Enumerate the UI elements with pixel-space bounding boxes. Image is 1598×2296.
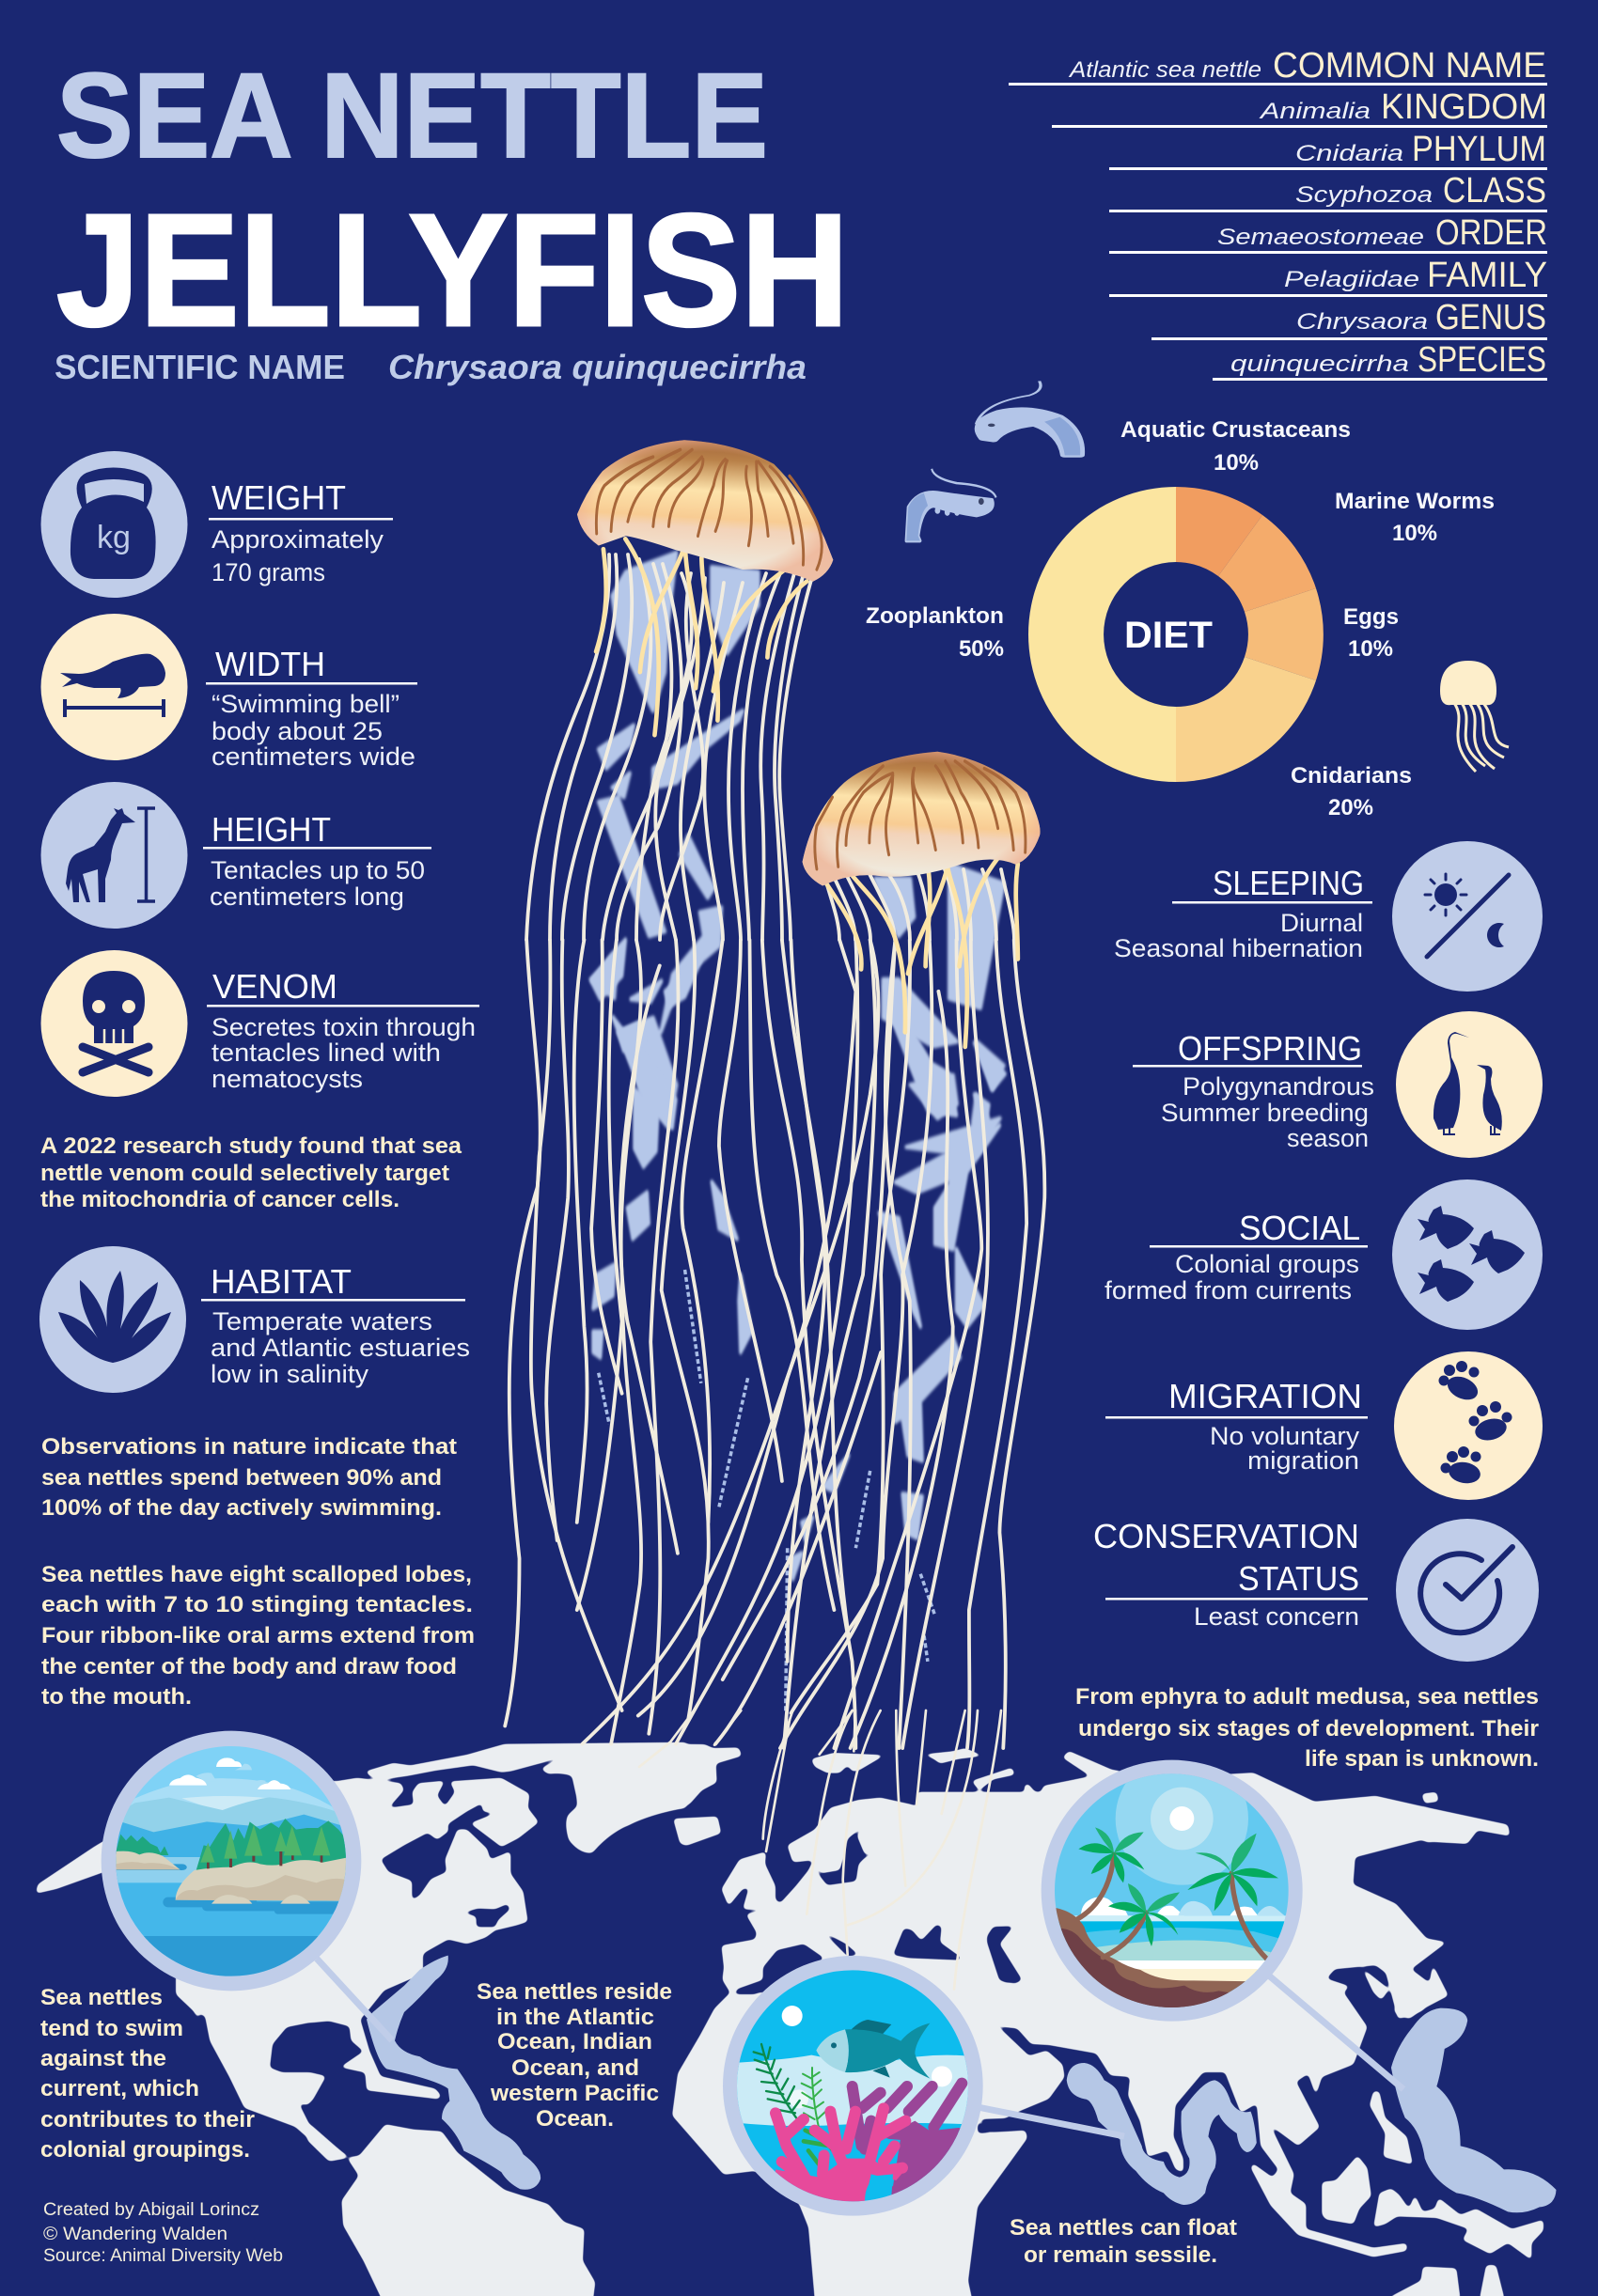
panel: weight xyxy=(41,451,393,598)
icon: small jellyfish xyxy=(1440,661,1509,772)
social text: SOCIAL xyxy=(1239,1209,1360,1247)
habitat text: and Atlantic estuaries xyxy=(211,1334,470,1362)
text: range oceans xyxy=(477,1979,672,2132)
feathery arm tips: large jellyfish xyxy=(599,1270,788,1713)
tentacles: upper section, smaller jellyfish xyxy=(825,869,1014,940)
diet labels: Marine Worms xyxy=(1335,489,1495,514)
taxonomy list: FAMILY xyxy=(1427,256,1547,295)
text: credits: Created by Abigail Lorincz xyxy=(43,2200,259,2220)
taxonomy list xyxy=(1009,46,1547,381)
icon: whale with ruler xyxy=(41,614,188,760)
icon: sun and moon xyxy=(1392,841,1543,992)
text: range oceans: Ocean. xyxy=(536,2106,614,2132)
text: range oceans: Ocean, and xyxy=(511,2055,639,2081)
text: swimming observations: Observations in nature indicate that xyxy=(41,1434,457,1460)
diet labels xyxy=(866,417,1495,820)
bell: large jellyfish xyxy=(577,440,833,582)
diet labels: 50% xyxy=(959,636,1004,662)
diet labels: Cnidarians xyxy=(1291,763,1412,789)
habitat text: Temperate waters xyxy=(212,1307,432,1335)
width text: “Swimming bell” xyxy=(212,690,400,718)
venom text: VENOM xyxy=(212,967,337,1006)
icon: shrimp upper xyxy=(976,381,1080,455)
habitat text: low in salinity xyxy=(211,1360,369,1388)
offspring text: Summer breeding xyxy=(1161,1099,1369,1127)
text: range oceans: western Pacific xyxy=(490,2081,659,2106)
height text: Tentacles up to 50 xyxy=(211,856,425,884)
social text: Colonial groups xyxy=(1175,1250,1359,1278)
conservation text xyxy=(1093,1517,1368,1631)
text: development stages: undergo six stages of development. Their xyxy=(1078,1716,1539,1742)
text: swimming against current: tend to swim xyxy=(40,2016,183,2041)
text: swimming observations xyxy=(41,1434,457,1521)
sleeping text: SLEEPING xyxy=(1213,864,1364,902)
height text xyxy=(203,810,431,911)
text: venom research note: nettle venom could selectively target xyxy=(40,1161,449,1186)
world map xyxy=(36,1742,1557,2296)
diet donut chart: DIET xyxy=(1124,615,1213,656)
feathery arm tips: smaller jellyfish xyxy=(855,1471,935,1662)
icon: kettlebell: kg xyxy=(97,520,131,555)
diet labels: Eggs xyxy=(1343,604,1399,630)
title: SCIENTIFIC NAME xyxy=(55,348,345,386)
conservation text: CONSERVATION xyxy=(1093,1517,1359,1555)
panel: habitat xyxy=(39,1246,470,1393)
weight text xyxy=(209,478,393,586)
tentacles: lower section xyxy=(505,940,1044,1748)
width text xyxy=(206,645,417,771)
venom text: Secretes toxin through xyxy=(212,1013,476,1041)
jellyfish: smaller right xyxy=(803,752,1041,1047)
sleeping text: Seasonal hibernation xyxy=(1114,934,1363,962)
icon: kettlebell xyxy=(41,451,188,598)
scene: tropical beach lens xyxy=(1042,1752,1303,2022)
migration text: MIGRATION xyxy=(1168,1377,1362,1415)
text: body description: each with 7 to 10 stinging tentacles. xyxy=(41,1592,473,1617)
text: body description: to the mouth. xyxy=(41,1684,192,1710)
width text: centimeters wide xyxy=(212,742,415,771)
panel: offspring xyxy=(1133,1011,1543,1158)
text: swimming against current: Sea nettles xyxy=(40,1985,163,2010)
panel: height xyxy=(41,782,431,929)
taxonomy list: Scyphozoa xyxy=(1295,182,1433,208)
taxonomy list: Pelagiidae xyxy=(1284,267,1419,292)
tentacles: fading over map xyxy=(639,1710,1001,1990)
sleeping text: Diurnal xyxy=(1280,909,1363,937)
scene: coastal forest lens xyxy=(102,1731,361,1991)
text: float or sessile: or remain sessile. xyxy=(1024,2242,1217,2268)
taxonomy list: Animalia xyxy=(1258,99,1371,124)
migration text: No voluntary xyxy=(1210,1422,1360,1450)
title: JELLYFISH xyxy=(56,181,849,360)
ocean current highlights xyxy=(367,1956,1557,2212)
text: body description xyxy=(41,1562,475,1710)
text: float or sessile xyxy=(1010,2215,1237,2268)
migration text: migration xyxy=(1247,1446,1359,1475)
text: body description: the center of the body and draw food xyxy=(41,1654,457,1679)
jellyfish: large left xyxy=(505,440,1044,1990)
taxonomy list: KINGDOM xyxy=(1381,87,1547,127)
text: range oceans: Sea nettles reside xyxy=(477,1979,672,2005)
panel: sleeping xyxy=(1114,841,1543,992)
text: development stages xyxy=(1075,1684,1539,1772)
yellow frills: smaller jellyfish xyxy=(826,855,1018,1047)
title: Chrysaora quinquecirrha xyxy=(388,348,807,386)
title xyxy=(55,49,849,386)
taxonomy list: Semaeostomeae xyxy=(1217,225,1424,250)
weight text: 170 grams xyxy=(212,558,325,586)
scene: coral reef lens xyxy=(723,1956,983,2216)
taxonomy list: GENUS xyxy=(1435,298,1546,337)
text: body description: Sea nettles have eight scalloped lobes, xyxy=(41,1562,472,1587)
bell: smaller jellyfish xyxy=(803,752,1041,886)
venom text: nematocysts xyxy=(212,1065,363,1093)
icon: shrimp lower xyxy=(906,469,996,540)
habitat text: HABITAT xyxy=(211,1262,352,1301)
text: body description: Four ribbon-like oral arms extend from xyxy=(41,1623,475,1648)
panel: venom xyxy=(41,950,479,1097)
panel: width xyxy=(41,614,417,771)
height text: centimeters long xyxy=(210,882,404,911)
conservation text: Least concern xyxy=(1194,1602,1359,1631)
text: swimming against current: colonial groupings. xyxy=(40,2137,250,2163)
panel: social xyxy=(1104,1179,1543,1330)
diet labels: 10% xyxy=(1348,636,1393,662)
text: range oceans: in the Atlantic xyxy=(496,2005,654,2030)
oral arms: large jellyfish xyxy=(590,553,759,1357)
taxonomy list: PHYLUM xyxy=(1412,130,1546,169)
yellow frills: large jellyfish xyxy=(596,539,807,735)
icon: paw prints xyxy=(1394,1351,1543,1500)
diet labels: 10% xyxy=(1214,450,1259,476)
offspring text: OFFSPRING xyxy=(1178,1029,1362,1068)
diet labels: Zooplankton xyxy=(866,603,1004,629)
weight text: Approximately xyxy=(212,525,384,554)
icon: school of fish xyxy=(1392,1179,1543,1330)
panel: conservation status xyxy=(1093,1517,1539,1662)
icon: aquatic plant xyxy=(39,1246,186,1393)
weight text: WEIGHT xyxy=(212,478,346,517)
icon: herons xyxy=(1396,1011,1543,1158)
text: swimming against current xyxy=(40,1985,255,2163)
text: swimming observations: sea nettles spend between 90% and xyxy=(41,1465,442,1491)
text: venom research note xyxy=(40,1133,462,1212)
conservation text: STATUS xyxy=(1238,1559,1359,1598)
text: credits: Source: Animal Diversity Web xyxy=(43,2246,283,2266)
taxonomy list: SPECIES xyxy=(1418,340,1546,380)
social text xyxy=(1104,1209,1368,1304)
width text: body about 25 xyxy=(212,717,383,745)
text: range oceans: Ocean, Indian xyxy=(497,2029,652,2054)
oral arms: smaller jellyfish (behind tentacles) xyxy=(791,865,1005,1579)
offspring text: season xyxy=(1287,1124,1369,1152)
icon: check mark xyxy=(1396,1519,1539,1662)
sleeping text xyxy=(1114,864,1372,962)
diet labels: 20% xyxy=(1328,795,1373,820)
habitat text xyxy=(201,1262,470,1388)
text: float or sessile: Sea nettles can float xyxy=(1010,2215,1237,2241)
diet labels: 10% xyxy=(1392,521,1437,546)
social text: formed from currents xyxy=(1104,1276,1352,1304)
height text: HEIGHT xyxy=(212,810,331,849)
icon: skull and crossbones xyxy=(41,950,188,1097)
venom text: tentacles lined with xyxy=(212,1039,441,1067)
text: credits xyxy=(43,2200,283,2266)
pointer lines to map xyxy=(317,1959,1403,2136)
taxonomy list: ORDER xyxy=(1435,213,1547,253)
text: venom research note: A 2022 research study found that sea xyxy=(40,1133,462,1159)
venom text xyxy=(207,967,479,1093)
diet labels: Aquatic Crustaceans xyxy=(1120,417,1351,443)
offspring text: Polygynandrous xyxy=(1183,1072,1374,1101)
taxonomy list: COMMON NAME xyxy=(1273,46,1546,86)
text: credits: © Wandering Walden xyxy=(43,2225,227,2244)
taxonomy list: Chrysaora xyxy=(1296,309,1428,335)
title: SEA NETTLE xyxy=(56,49,768,183)
panel: migration xyxy=(1105,1351,1543,1500)
text: swimming against current: against the xyxy=(40,2046,166,2071)
text: swimming against current: contributes to their xyxy=(40,2107,255,2132)
text: swimming against current: current, which xyxy=(40,2076,199,2101)
text: venom research note: the mitochondria of cancer cells. xyxy=(40,1187,400,1212)
text: development stages: From ephyra to adult medusa, sea nettles xyxy=(1075,1684,1539,1710)
text: development stages: life span is unknown. xyxy=(1305,1746,1539,1772)
offspring text xyxy=(1133,1029,1374,1152)
taxonomy list: Cnidaria xyxy=(1295,141,1403,166)
icon: giraffe with bar xyxy=(41,782,188,929)
taxonomy list: CLASS xyxy=(1443,171,1546,211)
taxonomy list: quinquecirrha xyxy=(1230,351,1409,377)
diet donut chart xyxy=(1028,487,1324,782)
taxonomy list: Atlantic sea nettle xyxy=(1068,57,1261,83)
migration text xyxy=(1105,1377,1368,1475)
tentacles: upper section, large jellyfish xyxy=(526,554,813,940)
text: swimming observations: 100% of the day actively swimming. xyxy=(41,1495,442,1521)
width text: WIDTH xyxy=(215,645,325,683)
